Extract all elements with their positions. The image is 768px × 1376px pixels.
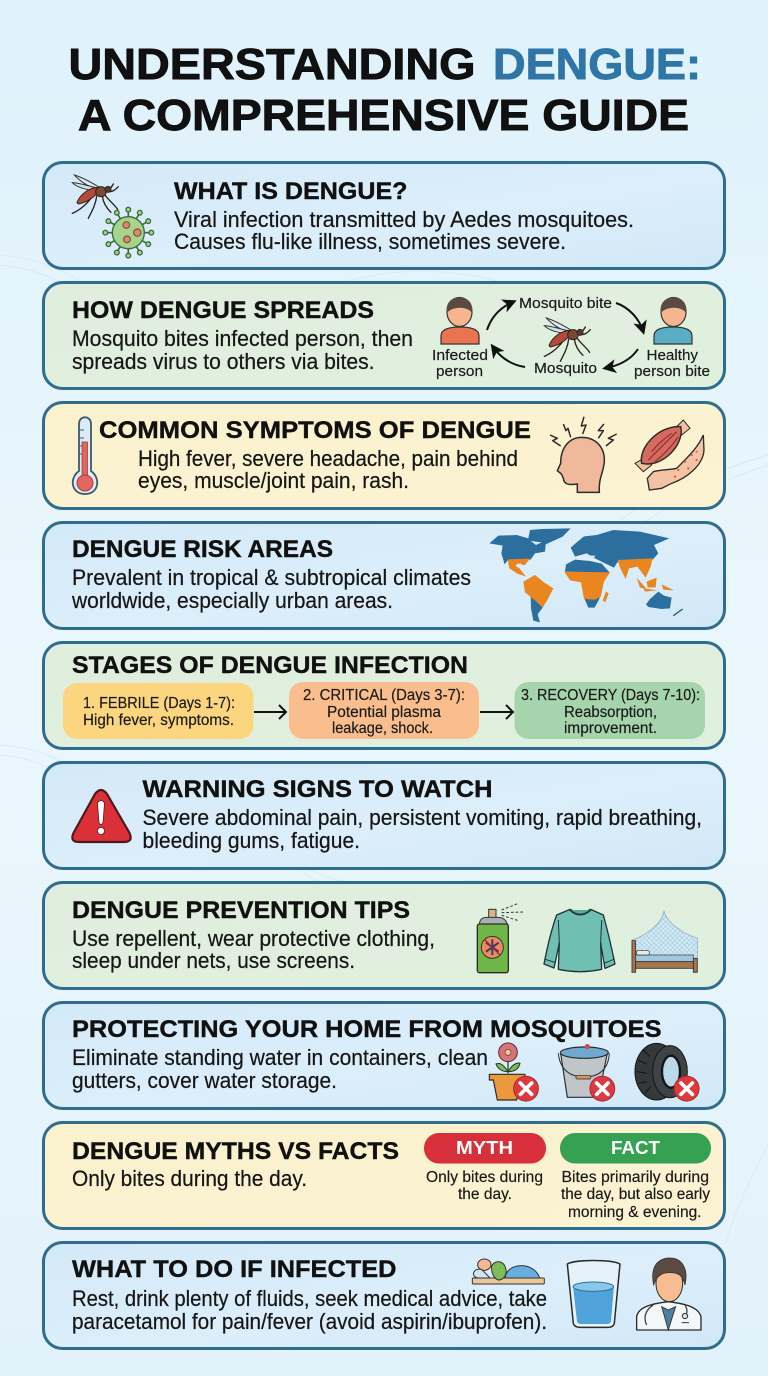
title [68,40,701,140]
description: Only bites during the day. [72,1166,307,1191]
icon: virus [103,207,154,258]
icon: thermometer [73,417,97,494]
description [174,207,634,254]
icon: mosquito [72,175,118,218]
icon: long sleeve shirt [544,909,615,972]
icon: flower pot [489,1043,538,1101]
heading: PROTECTING YOUR HOME FROM MOSQUITOES [72,1016,662,1043]
cycle labels: person bite [634,363,710,380]
icon: infected person [441,297,479,344]
panel: stages [44,642,724,748]
stage 3: improvement. [564,720,657,737]
heading: COMMON SYMPTOMS OF DENGUE [99,417,531,444]
heading: WHAT TO DO IF INFECTED [72,1256,396,1283]
description [142,805,702,853]
description: Rest, drink plenty of fluids, seek medical advice, take [72,1286,547,1311]
panel: what is dengue [44,162,724,268]
description: Severe abdominal pain, persistent vomiting, rapid breathing, [142,805,702,830]
title: DENGUE: [493,40,701,89]
panel: warning signs [44,762,724,868]
description [72,326,413,374]
icon: muscle and rash [635,420,704,490]
heading: DENGUE PREVENTION TIPS [72,897,410,924]
stage 2 [289,682,479,739]
cycle labels: Mosquito bite [519,295,612,312]
cycle labels: person [436,363,483,380]
cycle labels: Healthy [646,347,699,364]
icon: doctor [637,1258,701,1330]
panel: common symptoms [44,402,724,508]
arrow [480,705,513,719]
panel: risk areas [44,522,724,628]
stage 1 [63,683,254,739]
description [72,1045,488,1093]
description: Eliminate standing water in containers, clean [72,1045,488,1070]
arrows: transmission cycle [487,302,643,368]
title: UNDERSTANDING [68,40,476,89]
stage 2: 2. CRITICAL (Days 3-7): [303,687,465,704]
fact column: morning & evening. [568,1204,702,1221]
panel: how dengue spreads [44,282,724,388]
icon: glass of water [567,1260,620,1327]
cycle labels [432,295,710,380]
fact column: FACT [611,1138,660,1158]
stage 3: Reabsorption, [564,704,657,721]
description: Prevalent in tropical & subtropical climates [72,565,471,590]
myth column: MYTH [456,1138,513,1158]
fact column: the day, but also early [561,1186,710,1203]
icon: person resting [472,1259,544,1284]
cycle labels: Mosquito [534,360,597,377]
stage 3 [514,682,705,739]
myth column: Only bites during [426,1169,543,1186]
fact column [560,1133,711,1221]
myth column: the day. [458,1186,512,1203]
stage 2: Potential plasma [327,704,441,721]
heading: HOW DENGUE SPREADS [72,297,374,324]
title: A COMPREHENSIVE GUIDE [78,91,689,140]
description: eyes, muscle/joint pain, rash. [138,468,409,493]
world map [489,528,683,622]
description: Use repellent, wear protective clothing, [72,926,435,951]
stage 2: leakage, shock. [332,720,433,737]
description: paracetamol for pain/fever (avoid aspirin/ibuprofen). [72,1309,547,1334]
description: bleeding gums, fatigue. [142,828,360,853]
description [138,446,518,493]
description [72,1286,547,1334]
description: spreads virus to others via bites. [72,349,374,374]
myth column [424,1133,546,1203]
heading: WARNING SIGNS TO WATCH [142,776,492,803]
stage 1: 1. FEBRILE (Days 1-7): [83,695,235,712]
description [72,926,435,973]
description: gutters, cover water storage. [72,1068,337,1093]
description: High fever, severe headache, pain behind [138,446,518,471]
description: worldwide, especially urban areas. [71,588,393,613]
description: Causes flu-like illness, sometimes severe. [174,229,566,254]
description: Mosquito bites infected person, then [72,326,413,351]
icon: healthy person [654,297,692,344]
stage 3: 3. RECOVERY (Days 7-10): [521,687,700,704]
heading: WHAT IS DENGUE? [174,178,408,205]
description: sleep under nets, use screens. [72,948,355,973]
fact column: Bites primarily during [562,1169,709,1186]
heading: STAGES OF DENGUE INFECTION [72,652,468,679]
heading: DENGUE RISK AREAS [72,536,333,563]
stage 1: High fever, symptoms. [83,712,234,729]
panel: what to do if infected [44,1242,724,1348]
panel: myths vs facts [44,1122,724,1228]
description [71,565,471,613]
icon: mosquito centre [544,318,590,361]
icon: bucket [558,1044,615,1101]
icon: headache [550,417,617,492]
icon: tyre [635,1043,699,1101]
icon: warning triangle [72,790,131,842]
heading: DENGUE MYTHS VS FACTS [72,1138,399,1165]
panel: prevention tips [44,882,724,988]
description: Viral infection transmitted by Aedes mosquitoes. [174,207,634,232]
icon: repellent spray [477,903,523,973]
icon: bed with mosquito net [632,911,697,972]
arrow [254,705,286,719]
panel: protecting your home [44,1002,724,1108]
cycle labels: Infected [432,347,488,364]
